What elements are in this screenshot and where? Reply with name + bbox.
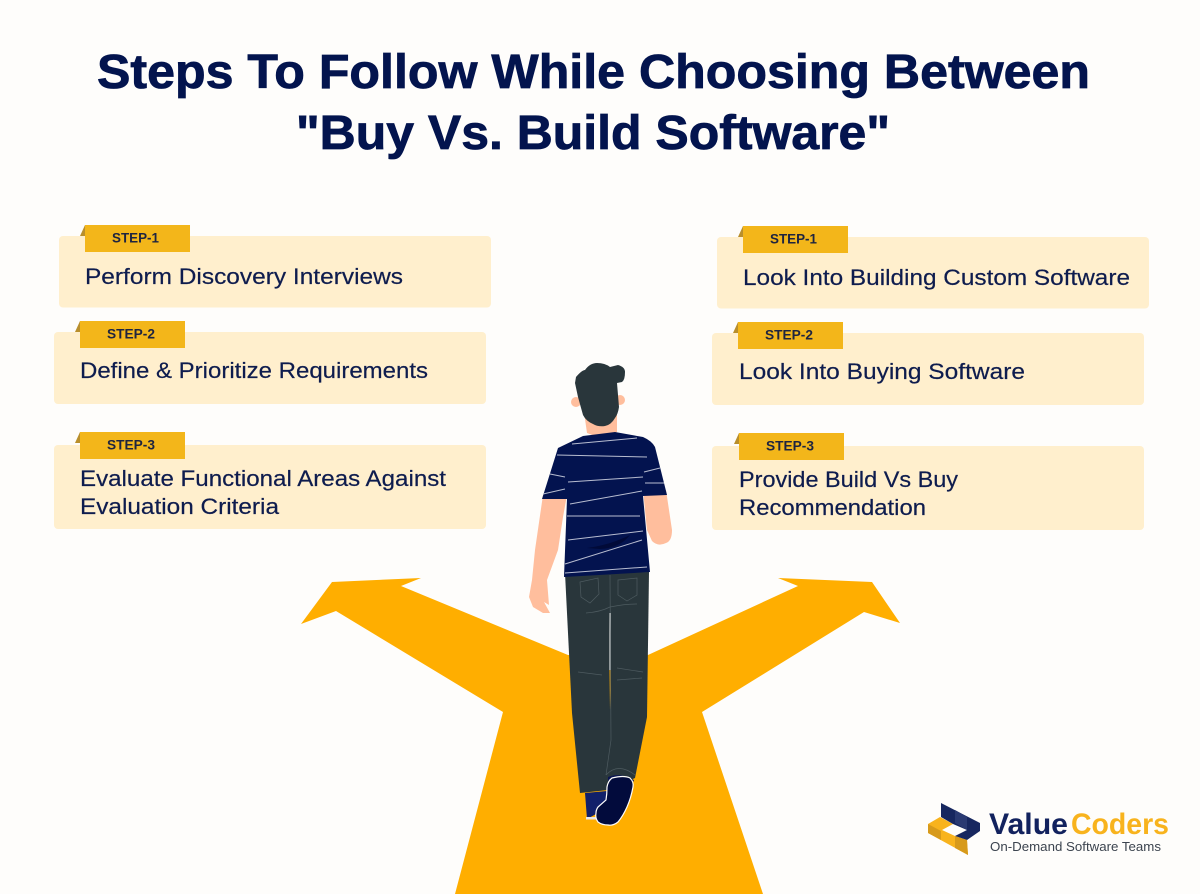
title: "Buy Vs. Build Software"	[296, 107, 890, 160]
panel: right step 1: STEP-1	[770, 232, 817, 246]
panel: right step 2: STEP-2	[765, 328, 813, 342]
arrow: forked road	[301, 578, 900, 894]
title	[97, 46, 1090, 160]
logo: ValueCoders: On-Demand Software Teams	[990, 839, 1162, 854]
figure: hair	[575, 363, 625, 426]
figure: right arm	[643, 490, 672, 545]
figure: t-shirt	[542, 432, 667, 577]
panel: left step 1	[59, 225, 491, 308]
panel: left step 2	[54, 321, 486, 404]
panel: right step 3	[712, 433, 1144, 530]
title: Steps To Follow While Choosing Between	[97, 46, 1090, 99]
logo: ValueCoders: Value	[989, 808, 1068, 841]
panel: right step 3: Provide Build Vs Buy	[739, 467, 959, 492]
panel: left step 2: STEP-2	[107, 326, 155, 342]
panel: left step 2: Define & Prioritize Requirements	[80, 358, 428, 383]
panel: left step 1: STEP-1	[112, 230, 159, 246]
panel: left step 3	[54, 432, 486, 529]
panel: right step 1: Look Into Building Custom Software	[743, 265, 1130, 290]
figure: left arm and hand	[529, 495, 567, 613]
panel: left step 3: Evaluate Functional Areas Against	[80, 466, 447, 491]
panel: right step 2	[712, 322, 1144, 405]
logo: ValueCoders: Coders	[1071, 808, 1169, 841]
figure: front shoe	[596, 775, 634, 825]
panel: left step 1: Perform Discovery Interviews	[85, 264, 403, 289]
figure: ears and neck	[571, 395, 625, 438]
figure: person walking	[529, 363, 672, 825]
logo: ValueCoders	[928, 803, 1169, 855]
panel: right step 2: Look Into Buying Software	[739, 359, 1025, 384]
figure: back shoe	[585, 791, 607, 819]
panel: right step 3: Recommendation	[739, 495, 926, 520]
panel: right step 1	[717, 226, 1149, 308]
panel: left step 3: Evaluation Criteria	[80, 494, 280, 519]
panel: left step 3: STEP-3	[107, 438, 155, 452]
icon: logo mark	[928, 803, 980, 855]
panel: right step 3: STEP-3	[766, 438, 814, 454]
figure: trousers	[565, 572, 649, 793]
